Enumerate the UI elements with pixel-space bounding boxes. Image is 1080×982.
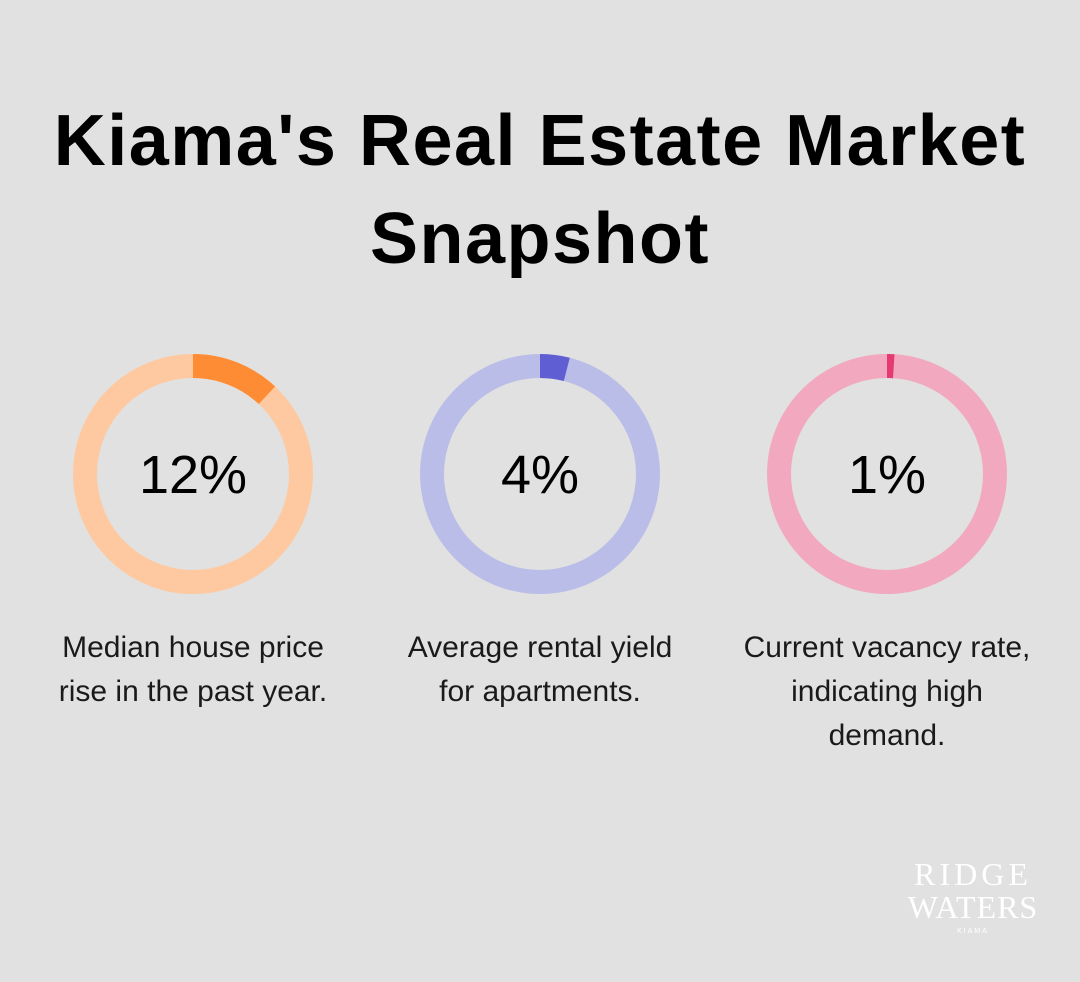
- title: [54, 101, 1026, 279]
- logo: RIDGE: [914, 856, 1032, 892]
- donut: 1%: 1%: [848, 445, 926, 505]
- label: 12%: Median house price rise in the past year.: [59, 631, 327, 708]
- label: 1%: Current vacancy rate, indicating high demand.: [744, 631, 1030, 752]
- title: Kiama's Real Estate Market: [54, 101, 1026, 181]
- label: 4%: Average rental yield for apartments.: [408, 631, 672, 708]
- logo: [908, 856, 1038, 935]
- donut: 12%: [85, 366, 301, 582]
- donut: 12%: 12%: [139, 445, 247, 505]
- donut: 4%: [432, 366, 648, 582]
- logo: KIAMA: [957, 928, 989, 935]
- title: Snapshot: [370, 199, 710, 279]
- logo: WATERS: [908, 889, 1038, 925]
- donut: 4%: 4%: [501, 445, 579, 505]
- donut: 1%: [779, 366, 995, 582]
